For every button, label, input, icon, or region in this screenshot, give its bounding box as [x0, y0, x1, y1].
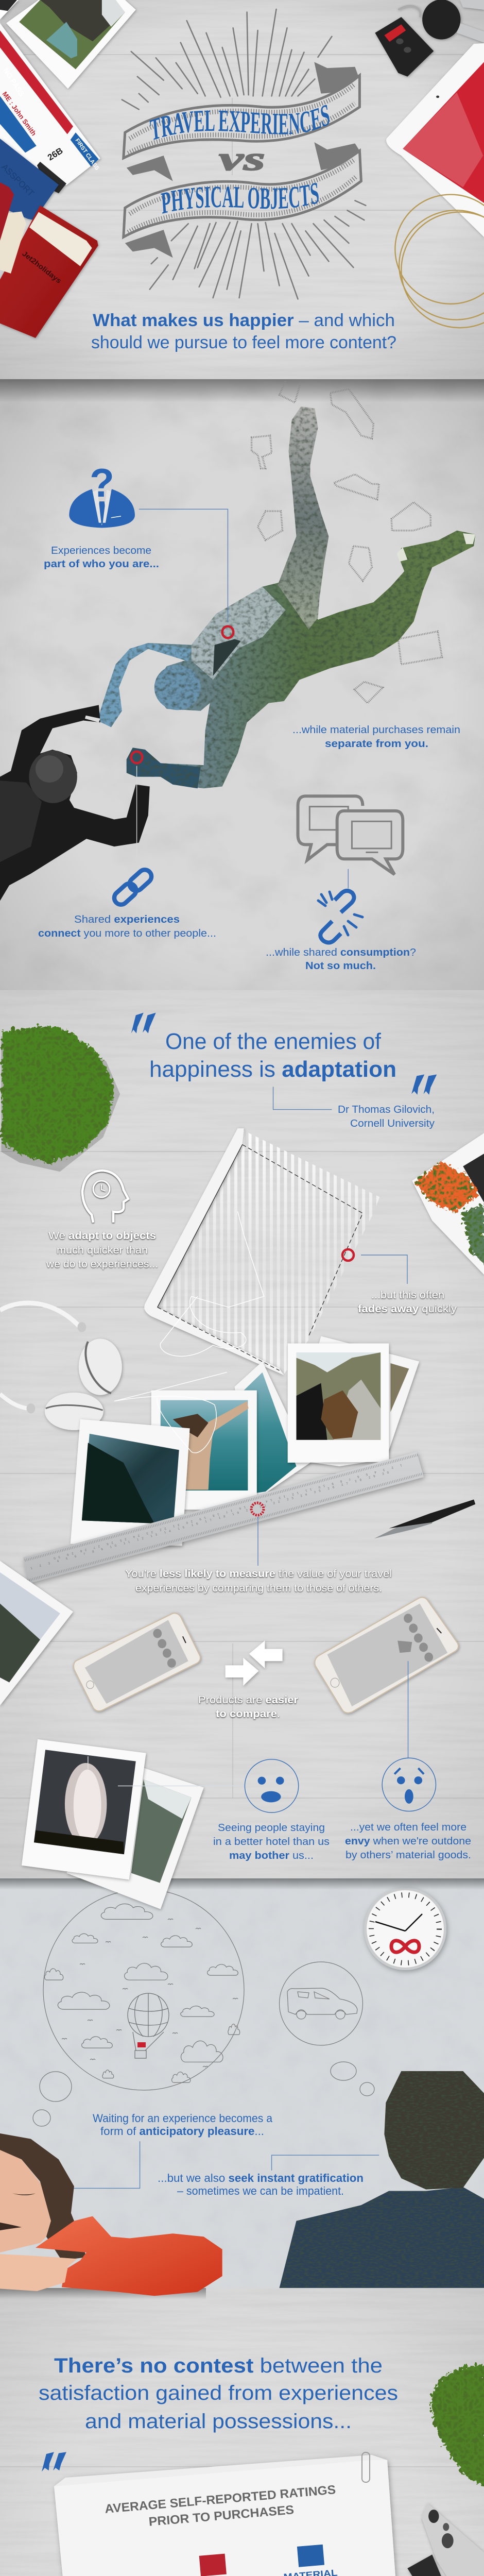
photo: Burj Al Arab polaroid: [22, 1739, 146, 1879]
photo: car window polaroid: [288, 1343, 389, 1463]
subtitle: What makes us happier – and which: [93, 311, 395, 330]
text: boarding pass labels: 26B: [46, 146, 65, 162]
icon: envious emoji: [382, 1758, 436, 1811]
decoration: birds: [62, 1919, 238, 2067]
headline: no contest: satisfaction gained from experiences: [39, 2382, 398, 2404]
icon: chain link: [112, 867, 154, 907]
object: car keys: [375, 0, 484, 77]
photo: back polaroid: [287, 1336, 419, 1466]
text: less likely to measure: You’re less likely to measure the value of your travel: [125, 1568, 392, 1580]
object: boarding pass: [0, 23, 100, 193]
title: ribbon banners and sunburst: [122, 8, 367, 300]
text: anticipatory pleasure: Waiting for an experience becomes a: [93, 2112, 273, 2125]
object: fountain pen: [374, 1500, 475, 1538]
object: right phone with five stars and pointing hand: [315, 1597, 458, 1713]
object: gold bracelets: [395, 195, 484, 328]
text: we adapt to objects: [46, 1230, 158, 1270]
connector: ruler marker to comparison text: [251, 1503, 264, 1566]
icon: closing quote mark: [411, 1075, 437, 1095]
callout: shared experiences connect: Shared experiences: [74, 914, 180, 925]
chart title: AVERAGE SELF-REPORTED RATINGS: [104, 2483, 336, 2516]
connector: gratification text to man: [272, 2155, 379, 2171]
panel: chart section wood background: [0, 2288, 484, 2576]
connector: hotel photo to surprised emoji: [118, 1785, 245, 1786]
illustration: thought bubble with clouds and balloon: [43, 1889, 244, 2090]
illustration: car in a thought bubble: [279, 1962, 362, 2045]
citation: Dr Thomas Gilovich: Cornell University: [350, 1118, 435, 1129]
object: passport: ASSPORT: [0, 162, 36, 198]
object: steel ruler: 1 2 3 4 5 6 7 8 9 10 11 12 13 14 15 16 17 18 19 20 21 22 23 24 25 26 27 28 29 30: [53, 1463, 402, 1560]
object: steel ruler: 1 2 3 4 5 6 7 8 9 10 11 12 13 14 15 16 17 18 19 20 21 22 23 24 25 26 27 28 29 30: [30, 1471, 390, 1570]
text: instant gratification: – sometimes we can be impatient.: [177, 2184, 344, 2197]
legend: material: [281, 2544, 338, 2576]
object: thin white earphone cable: [114, 1211, 264, 1453]
chart paper with fold: [54, 2452, 419, 2576]
connector: person icon to skydiver: [139, 509, 233, 638]
text: envy of material goods: by others’ material goods.: [345, 1850, 471, 1861]
text: better hotel may bother us: in a better hotel than us: [213, 1836, 330, 1848]
panel: title section wood background: [0, 0, 484, 379]
citation: Dr Thomas Gilovich: [273, 1087, 435, 1129]
text: fades away quickly: [358, 1290, 457, 1315]
illustration: skydiver made of landscape: [97, 406, 475, 788]
photo: forest valley polaroid: [71, 1419, 190, 1546]
text: instant gratification: ...but we also seek instant gratification: [158, 2172, 364, 2184]
text: boarding pass labels: [1, 66, 100, 172]
photo: mountain polaroid at left edge: [0, 1561, 73, 1705]
quote: enemies of happiness: One of the enemies of: [165, 1029, 382, 1054]
icon: hot air balloon: [128, 1993, 169, 2058]
callout: shared consumption not so much: [266, 947, 416, 972]
callout: experiences become part of who you are: part of who you are...: [44, 558, 159, 570]
icon: chat bubbles with monitors: [298, 796, 403, 888]
panel: sky section background: [0, 379, 484, 990]
photo: alpine polaroid: [0, 0, 136, 89]
chart title: PRIOR TO PURCHASES: [148, 2503, 295, 2529]
callout: material purchases remain separate: [292, 724, 460, 750]
text: boarding pass labels: ME : John Smith: [1, 90, 38, 137]
text: boarding pass labels: NG PASS: [2, 66, 26, 98]
object: red wallet: Jet2holidays: [21, 249, 63, 285]
object: moss heart: [429, 2361, 484, 2484]
banner: lower ribbon: [124, 142, 361, 258]
text: products easier to compare: to compare .: [216, 1708, 280, 1720]
text: envy of material goods: envy when we're outdone: [345, 1836, 471, 1847]
text: better hotel may bother us: Seeing people staying: [218, 1822, 325, 1834]
icon: person with question mark: [69, 460, 135, 528]
callout: shared experiences connect: [38, 914, 216, 939]
object: vintage camera: [407, 2503, 484, 2576]
text: products easier to compare: Products are easier: [198, 1694, 298, 1706]
photo: girl by lake polaroid: [151, 1391, 257, 1510]
citation: Dr Thomas Gilovich: Dr Thomas Gilovich,: [338, 1104, 435, 1115]
connector: right phone to envy emoji: [408, 1661, 409, 1758]
connector: hands to link icon: [131, 752, 142, 859]
text: instant gratification: [158, 2172, 364, 2197]
headline: no contest: There’s no contest between the: [54, 2354, 383, 2377]
object: passport: [0, 139, 59, 220]
text: products easier to compare: [198, 1694, 298, 1720]
quote: enemies of happiness: happiness is adaptation: [149, 1057, 396, 1082]
title text: travel experiences: TRAVEL EXPERIENCES: [149, 105, 330, 140]
photo: tilted lake polaroid: [235, 1362, 310, 1502]
object: paper clip: [362, 2452, 370, 2482]
illustration: black suited skydiver: [0, 705, 150, 901]
text: fades away quickly: ...but this often: [371, 1290, 444, 1301]
callout: shared experiences connect: connect you more to other people...: [38, 928, 216, 939]
icons: faint hatched objects around the skydiver: [252, 381, 442, 703]
text: anticipatory pleasure: form of anticipatory pleasure...: [100, 2125, 264, 2138]
object: steel ruler: [23, 1452, 424, 1584]
text: anticipatory pleasure: [93, 2112, 273, 2138]
icon: head with clock: [82, 1171, 128, 1223]
chart title: [104, 2483, 338, 2533]
panel: anticipation wall background: [0, 1878, 484, 2291]
connector: tablet fades away: [342, 1249, 407, 1284]
headline: no contest: and material possessions...: [85, 2410, 352, 2433]
icon: opening quote mark: [131, 1013, 156, 1033]
text: we adapt to objects: We adapt to objects: [48, 1230, 156, 1242]
text: boarding pass labels: FIRST CLASS: [74, 138, 100, 172]
illustration: woman resting on hands: [0, 2133, 222, 2296]
text: we adapt to objects: we do to experiences...: [46, 1259, 158, 1270]
panel: adaptation section wood background: [0, 990, 484, 1890]
callout: shared consumption not so much: Not so much.: [305, 960, 376, 972]
text: envy of material goods: ...yet we often feel more: [350, 1822, 466, 1833]
callout: material purchases remain separate: separate from you.: [325, 738, 428, 750]
object: white headphones: [0, 1303, 122, 1430]
connector: pleasure text to woman: [66, 2141, 140, 2188]
text: fades away quickly: fades away quickly: [358, 1303, 457, 1315]
object: red tablet: [386, 43, 484, 237]
object: red wallet: [0, 182, 98, 338]
icon: clouds: [45, 1904, 240, 2082]
quote: enemies of happiness: [149, 1029, 396, 1082]
title text: physical objects: PHYSICAL OBJECTS: [161, 183, 319, 214]
icon: opening quote mark: [42, 2452, 66, 2472]
text: less likely to measure: [125, 1568, 392, 1594]
icon: person with question mark: ?: [90, 460, 114, 505]
banner: upper ribbon: [124, 62, 359, 181]
decoration: sunburst rays: [122, 9, 366, 299]
decoration: small thought bubbles: [33, 2062, 374, 2126]
bar chart: average self-reported ratings: [76, 2481, 389, 2576]
icon: surprised emoji: [245, 1759, 299, 1812]
callout: experiences become part of who you are: Experiences become: [51, 545, 151, 556]
text: better hotel may bother us: [213, 1822, 330, 1861]
illustration: fading striped tablet: [144, 1128, 379, 1375]
title text: vs: vs: [219, 140, 265, 178]
headline: no contest: [39, 2354, 398, 2433]
object: left phone with four stars: [74, 1613, 200, 1711]
subtitle: [91, 311, 396, 352]
text: envy of material goods: [345, 1822, 471, 1861]
legend: experiential: [174, 2551, 253, 2576]
icon: compare arrows: [226, 1641, 283, 1686]
object: white frame with orange flower: [412, 1133, 484, 1275]
photo: palm hotel polaroid: [66, 1768, 204, 1909]
photo: hotel polaroids: [22, 1739, 204, 1909]
callout: shared consumption not so much: ...while shared consumption ?: [266, 947, 416, 958]
object: green plant: [0, 1024, 120, 1172]
callout: material purchases remain separate: ...while material purchases remain: [292, 724, 460, 736]
callout: experiences become part of who you are: [44, 545, 159, 570]
text: we adapt to objects: much quicker than: [57, 1245, 148, 1256]
icon: broken chain link: [318, 891, 362, 943]
subtitle: should we pursue to feel more content?: [91, 333, 396, 352]
illustration: man from behind: [280, 2071, 484, 2288]
text: less likely to measure: experiences by comparing them to those of others.: [135, 1583, 382, 1594]
icon: clock with infinity symbol: [364, 1888, 446, 1970]
photo: polaroids of a girl by a lake and in a car: [71, 1336, 419, 1546]
text: better hotel may bother us: may bother us...: [229, 1850, 314, 1861]
